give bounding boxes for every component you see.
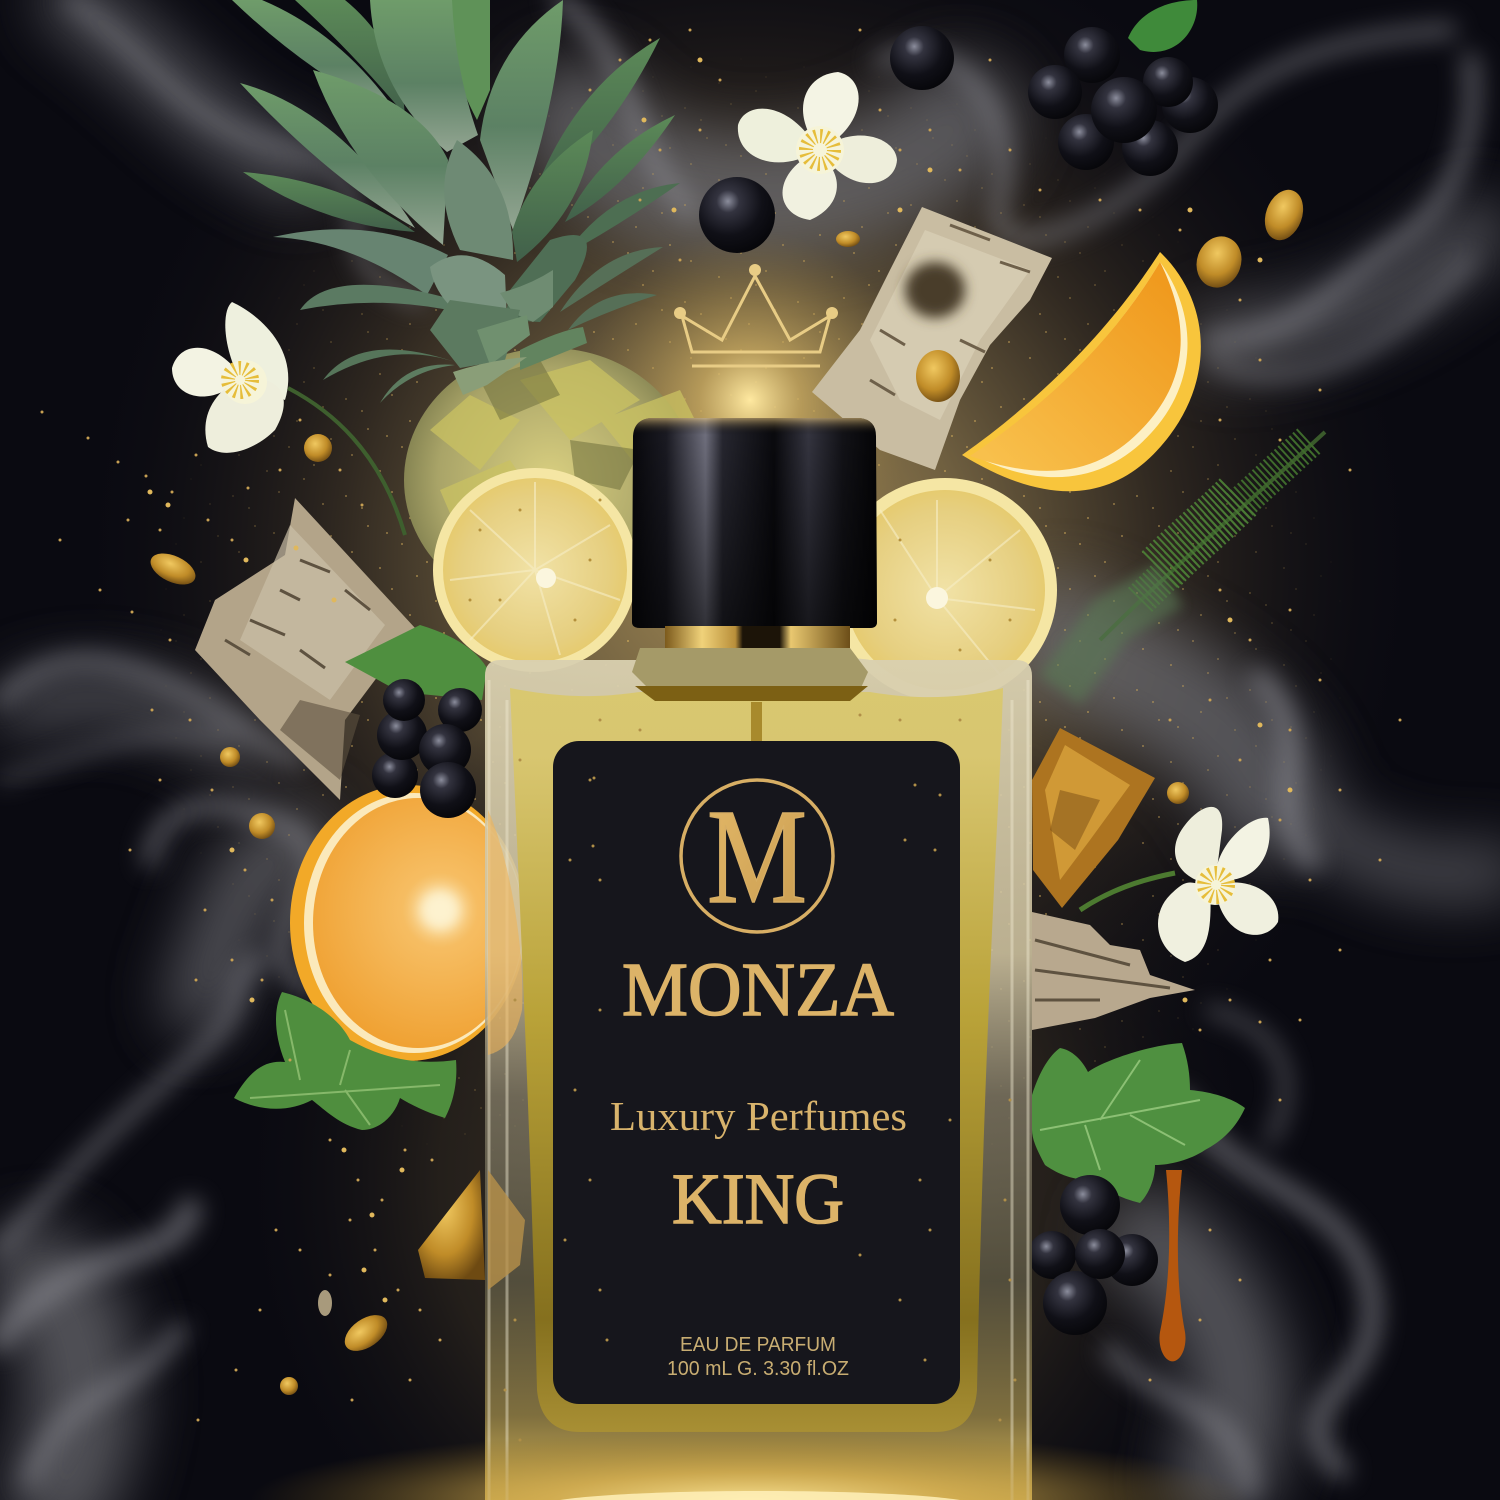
orange wedge top right: [962, 252, 1201, 491]
berries lower right: [1028, 1175, 1158, 1335]
birch bark left: [195, 498, 415, 800]
pineapple crown leaves: [232, 0, 680, 403]
lemon slice left: [433, 468, 637, 672]
berries left cluster: [372, 679, 482, 818]
bottle: [485, 418, 1032, 1500]
black label: [553, 741, 960, 1404]
green leaf lower left: [234, 992, 456, 1130]
label logo circle: [681, 780, 833, 932]
brand name: MONZA: [622, 948, 894, 1032]
lemon slice right: [833, 478, 1057, 702]
glass edge highlights: [489, 680, 1028, 1500]
logo letter: M: [707, 782, 807, 932]
volume: 100 mL G. 3.30 fl.OZ: [667, 1358, 849, 1380]
crown outline: [674, 264, 838, 366]
orange half left: [290, 785, 526, 1061]
white flower left: [172, 302, 405, 535]
neck base shadow: [635, 686, 868, 701]
orange seen through glass: [488, 810, 522, 1055]
pineapple body: [404, 348, 700, 612]
tagline: Luxury Perfumes: [610, 1093, 907, 1139]
rosemary sprig: [1060, 432, 1325, 690]
neck glass: [632, 648, 868, 690]
bark piece right: [1032, 912, 1195, 1030]
dip tube: [751, 702, 762, 742]
birch bark top right: [812, 207, 1052, 470]
nugget seen through glass: [488, 1170, 525, 1290]
green leaf behind left berries: [345, 625, 487, 700]
berries top: [699, 0, 1218, 253]
dust haze: [175, 76, 1332, 1135]
gold nuggets: [146, 184, 1310, 1395]
product name: KING: [672, 1159, 844, 1239]
crown glow: [580, 230, 920, 570]
fragrance type: EAU DE PARFUM: [680, 1334, 836, 1356]
gold collar: [665, 626, 850, 648]
cap: [632, 418, 877, 628]
specks on bottle and label: [505, 715, 1015, 1440]
amber resin: [1032, 728, 1155, 908]
honey drip: [1159, 1170, 1186, 1361]
white flower right: [1080, 807, 1278, 962]
white flower top: [738, 72, 897, 220]
green leaf lower right: [1032, 1043, 1245, 1203]
perfume liquid: [510, 688, 1003, 1432]
bottom golden light: [250, 1430, 1250, 1500]
glass body: [485, 656, 1032, 1500]
